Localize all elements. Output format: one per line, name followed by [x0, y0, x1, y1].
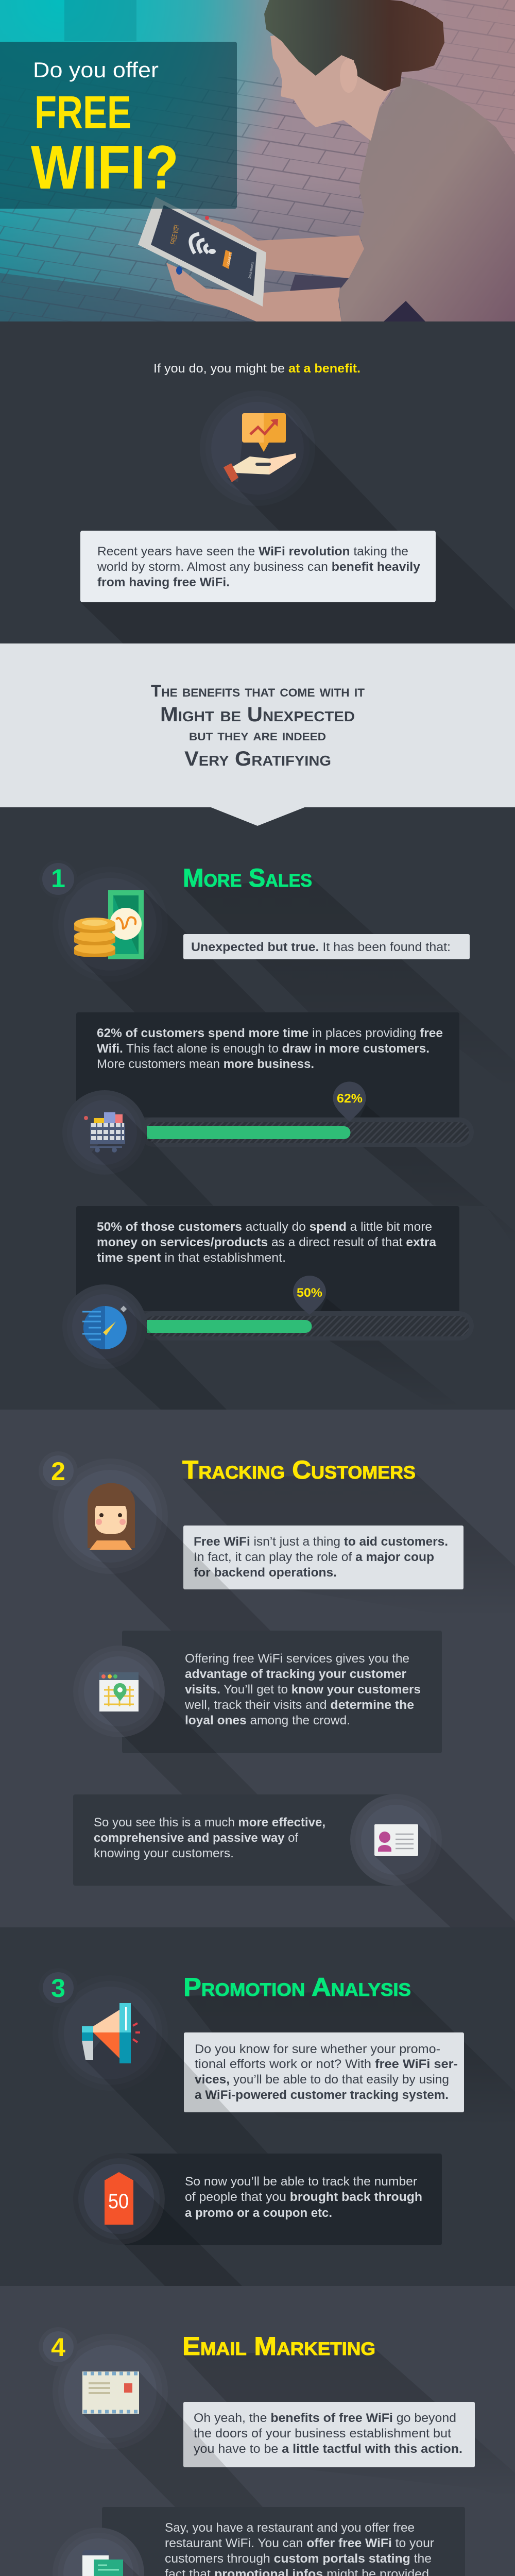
light banner: benefits: The benefits that come with it [151, 682, 365, 700]
number badge 2: 2 [51, 1457, 65, 1486]
icon: map window [73, 1646, 258, 1794]
number badge 1 [39, 860, 77, 898]
light banner: benefits: but they are indeed [189, 727, 326, 744]
text box: benefits beyond doors: the doors of your business establishment but [194, 2427, 451, 2441]
section 2: tracking customers [0, 1410, 515, 1927]
text box: promotional efforts: tional efforts work or not? With free WiFi ser- [195, 2057, 458, 2071]
progress bar: 62 percent [139, 1082, 474, 1147]
panel: tracking advantage: well, track their visits and determine the [184, 1698, 414, 1712]
text box: promotional efforts: Do you know for sure whether your promo- [195, 2042, 440, 2056]
heading and box shadow [182, 1473, 515, 1618]
icon: hand with chart bubble [200, 391, 398, 531]
number badge 1: 1 [51, 864, 65, 893]
panel: 62 percent: Wifi. This fact alone is enough to draw in more customers. [97, 1042, 430, 1056]
panel: 50 percent: time spent in that establishment. [97, 1251, 286, 1265]
intro text box: world by storm. Almost any business can benefit heavily [97, 560, 421, 574]
shadows: 50 percent bar [312, 1298, 464, 1410]
hero title panel [0, 42, 237, 209]
icon: phone with chat [53, 2528, 237, 2576]
panel: 50 percent: 50% of those customers actually do spend a little bit more [97, 1220, 432, 1234]
text box: benefits beyond doors: Oh yeah, the benefits of free WiFi go beyond [194, 2411, 456, 2425]
section heading: Email Marketing [182, 2332, 375, 2361]
panel: tracking advantage: visits. You’ll get to know your customers [185, 1683, 421, 1697]
cobbles [0, 273, 288, 321]
panel: custom portals: Say, you have a restaurant and you offer free [165, 2521, 415, 2535]
shadows: 62 percent bar [350, 1105, 515, 1247]
progress bar: 50 percent [139, 1276, 474, 1341]
light banner: benefits: Might be Unexpected [160, 703, 355, 726]
hero: photo of woman with tablet [0, 0, 515, 322]
intro text box [80, 531, 436, 602]
panel: 62 percent [76, 1012, 459, 1148]
intro heading: If you do, you might be at a benefit. [153, 362, 360, 376]
intro text box: from having free WiFi. [97, 575, 230, 589]
number badge 3 [39, 1968, 78, 2007]
wifi symbol [191, 234, 208, 253]
text box: free wifi: In fact, it can play the role of a major coup [194, 1550, 434, 1564]
icon: megaphone [53, 1975, 268, 2154]
neck and face [270, 31, 402, 141]
panel: tracking advantage: advantage of tracking your customer [185, 1667, 406, 1681]
section 3: promotion analysis [0, 1927, 515, 2286]
title and box shadow [183, 878, 515, 1092]
text box: promotional efforts: a WiFi-powered customer tracking system. [195, 2088, 449, 2102]
intro text box: Recent years have seen the WiFi revolution taking the [97, 545, 408, 558]
panel: custom portals [102, 2507, 465, 2576]
panel: promo tracking: of people that you brought back through [185, 2190, 422, 2204]
intro box shadow [80, 534, 515, 643]
panel: 62 percent: 62% of customers spend more time in places providing free [97, 1026, 443, 1040]
panel: tracking advantage: loyal ones among the crowd. [185, 1714, 350, 1727]
marker: 50% [293, 1276, 326, 1315]
panel: 62 percent: More customers mean more business. [97, 1057, 314, 1071]
intro section [0, 321, 515, 643]
number badge 3: 3 [51, 1974, 65, 2003]
panel: promo tracking: a promo or a coupon etc. [185, 2206, 332, 2220]
panel: 50 percent [76, 1206, 459, 1342]
icon: id card [350, 1794, 515, 1927]
panel: passive way: So you see this is a much more effective, [94, 1816, 325, 1829]
section heading: Tracking Customers [182, 1455, 416, 1484]
tablet: Search Networks [248, 262, 255, 279]
tablet [138, 197, 266, 307]
marker: 62% [333, 1082, 366, 1122]
text box: free wifi: Free WiFi isn’t just a thing to aid customers. [194, 1535, 448, 1549]
panel: passive way [73, 1794, 396, 1886]
text box: free wifi [183, 1526, 464, 1589]
marker: 62%: 62% [337, 1092, 363, 1106]
icon: money and coins [53, 867, 266, 1012]
text box: promotional efforts: vices, you’ll be able to do that easily by using [195, 2073, 449, 2087]
section 4: email marketing [0, 2286, 515, 2576]
light banner: benefits: Very Gratifying [184, 748, 331, 770]
icon: discount tag [73, 2153, 242, 2286]
section heading: Promotion Analysis [183, 1973, 411, 2002]
coin stack [74, 918, 115, 957]
ear [340, 59, 357, 93]
panel: promo tracking: So now you’ll be able to track the number [185, 2175, 417, 2189]
lower arm and hand [166, 263, 341, 322]
icon: shopping cart [62, 1090, 213, 1206]
section 1: more sales [0, 807, 515, 1410]
heading shadow [182, 2349, 515, 2499]
title line: free: FREE [35, 87, 131, 139]
light banner: benefits [0, 643, 515, 826]
text box: free wifi: for backend operations. [194, 1566, 337, 1580]
text box: unexpected [183, 934, 470, 959]
panel: passive way: comprehensive and passive way of [94, 1831, 298, 1845]
number badge 4 [39, 2327, 78, 2366]
icon: stopwatch [62, 1284, 227, 1410]
panel: 50 percent: money on services/products as a direct result of that extra [97, 1235, 437, 1249]
number badge 4: 4 [51, 2333, 65, 2362]
icon: discount tag: 50 [108, 2190, 129, 2213]
title line: do you offer: Do you offer [33, 58, 159, 82]
icon: woman avatar [53, 1459, 270, 1631]
panel: passive way: knowing your customers. [94, 1846, 234, 1860]
heading and box shadow [184, 1990, 515, 2128]
section heading: More Sales [183, 863, 312, 892]
panel: promo tracking [124, 2154, 442, 2245]
panel: custom portals: customers through custom portals stating the [165, 2552, 432, 2566]
upper arm and hand [206, 217, 364, 278]
text box: unexpected: Unexpected but true. It has been found that: [191, 940, 451, 954]
text box: promotional efforts [184, 2032, 464, 2112]
tablet: FREE WIFI [168, 224, 181, 245]
panel: custom portals: restaurant WiFi. You can offer free WiFi to your [165, 2536, 434, 2550]
trousers [290, 275, 349, 291]
hair and bun [264, 0, 444, 91]
sweater [338, 77, 515, 321]
panel: tracking advantage: Offering free WiFi services gives you the [185, 1652, 409, 1666]
tablet: CONNECT [227, 252, 233, 266]
panel: tracking advantage [122, 1631, 442, 1753]
text box: benefits beyond doors: you have to be a little tactful with this action. [194, 2442, 462, 2456]
number badge 2 [39, 1451, 78, 1490]
text box: benefits beyond doors [183, 2402, 475, 2467]
icon: envelope [53, 2334, 263, 2507]
marker: 50%: 50% [297, 1286, 322, 1300]
title line: wifi: WIFI? [31, 133, 179, 202]
